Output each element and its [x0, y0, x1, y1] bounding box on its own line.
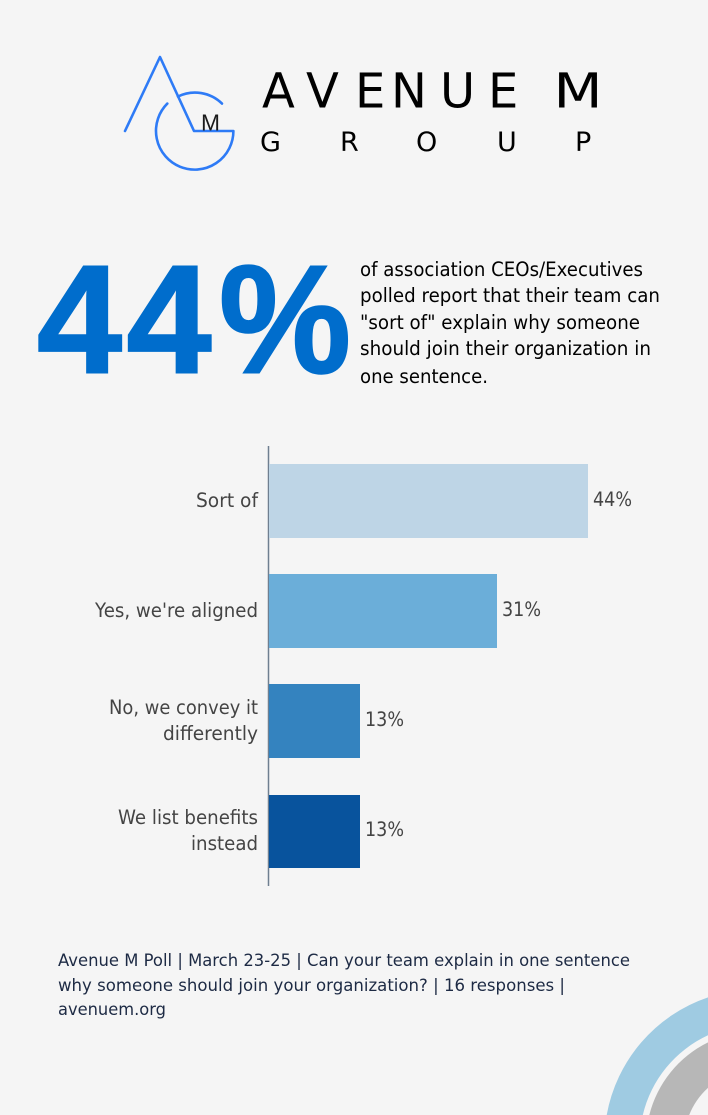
big stat: 44%: 4: [37, 234, 122, 406]
logo: [125, 57, 602, 170]
big stat: 44%: 4: [126, 234, 212, 406]
footer source note: avenuem.org: [58, 1000, 166, 1019]
bar: Sort of: [196, 464, 632, 538]
bar: Sort of: 44%: [593, 488, 632, 511]
logo mark letter: M: [201, 110, 220, 136]
logo wordmark: M: M: [554, 64, 602, 120]
bar chart: [94, 446, 632, 886]
chart axis: [268, 446, 270, 886]
bar: No, we convey it differently: [109, 684, 404, 758]
logo wordmark: Group: GROUP: [260, 127, 591, 158]
decorative corner arcs: [607, 997, 708, 1115]
stat description: of association CEOs/Executives: [360, 258, 643, 281]
footer source note: [58, 951, 630, 1019]
bar: No, we convey it differently: differently: [163, 722, 258, 745]
big stat: 44%: %: [219, 234, 351, 406]
bar: Yes, we're aligned: 31%: [502, 598, 541, 621]
bar: Yes, we're aligned: [94, 574, 541, 648]
footer source note: why someone should join your organization? | 16 responses |: [58, 976, 565, 995]
bar: No, we convey it differently: No, we convey it: [109, 696, 258, 719]
big stat: 44%: [37, 234, 351, 406]
stat description: [360, 258, 660, 388]
icon: logo mark: [125, 57, 233, 170]
logo wordmark: Avenue: AVENUE: [262, 64, 518, 120]
footer source note: Avenue M Poll | March 23-25 | Can your team explain in one sentence: [58, 951, 630, 970]
bar: We list benefits instead: instead: [191, 832, 258, 855]
bar: Sort of: Sort of: [196, 489, 259, 512]
stat description: should join their organization in: [360, 337, 651, 360]
stat description: one sentence.: [360, 365, 488, 388]
bar: We list benefits instead: [118, 795, 404, 868]
bar: We list benefits instead: We list benefits: [118, 806, 258, 829]
stat description: "sort of" explain why someone: [360, 311, 640, 334]
bar: We list benefits instead: 13%: [365, 818, 404, 841]
bar: Yes, we're aligned: Yes, we're aligned: [94, 599, 258, 622]
stat description: polled report that their team can: [360, 284, 660, 307]
bar: No, we convey it differently: 13%: [365, 708, 404, 731]
